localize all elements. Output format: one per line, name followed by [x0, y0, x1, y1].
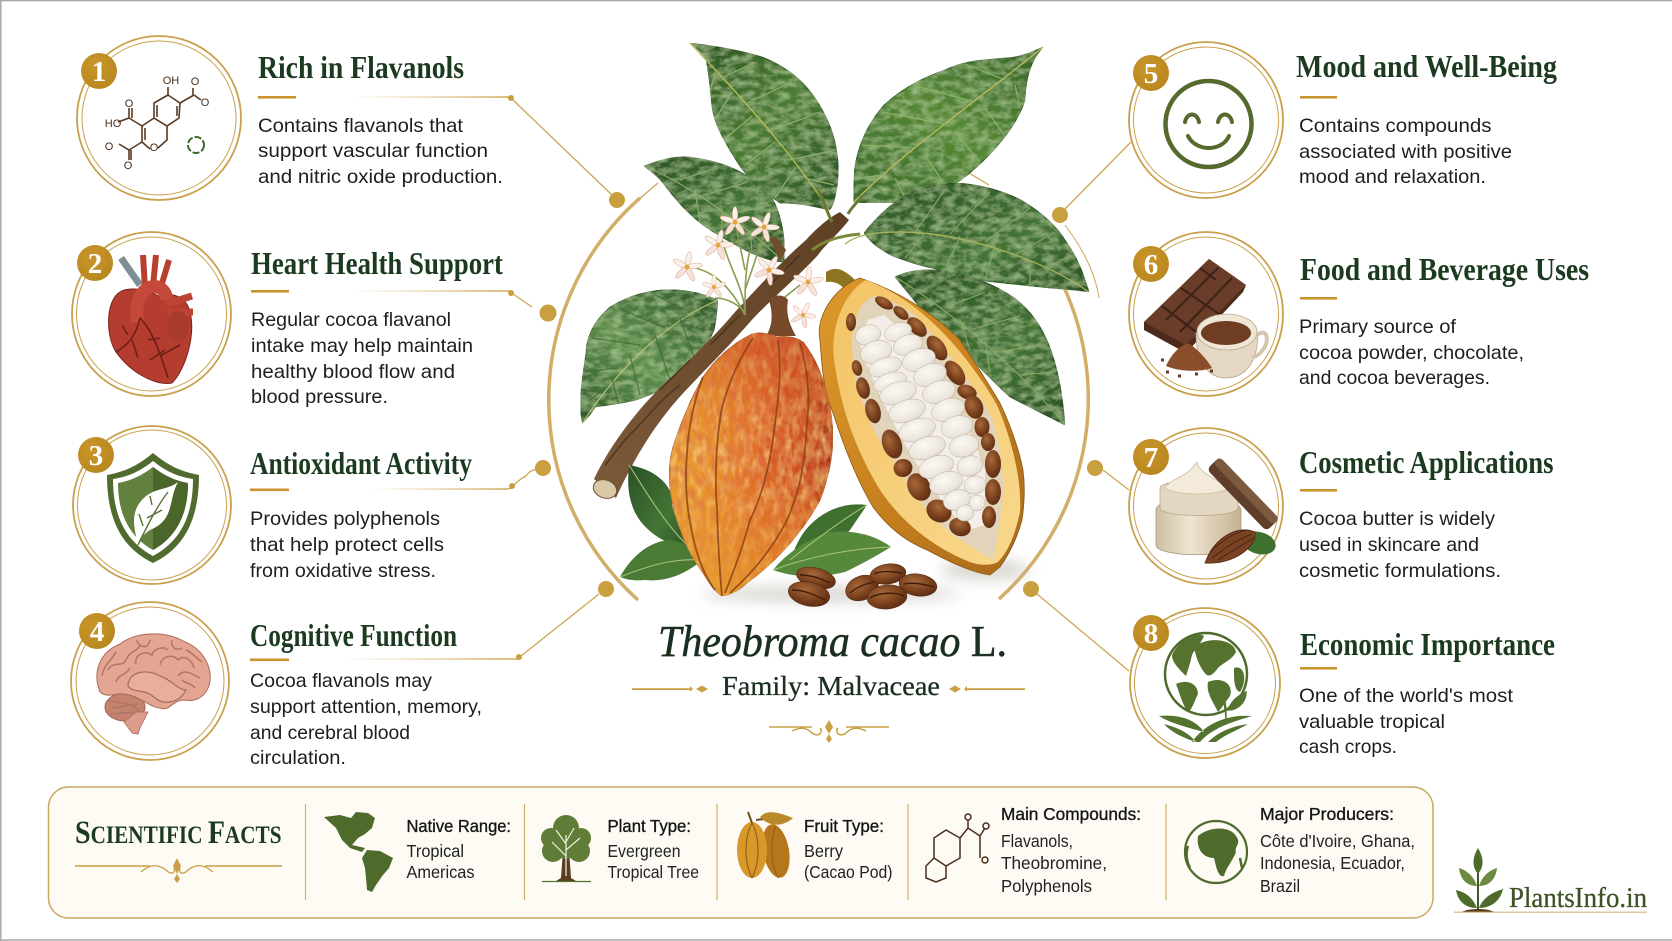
value: Flavanols, — [1001, 831, 1073, 851]
leaf: top right — [854, 47, 1043, 203]
icon: chocolate bar and cocoa cup — [1144, 259, 1267, 378]
label: Main Compounds: — [1001, 804, 1141, 824]
panel 5: mood and well-being — [1129, 42, 1557, 198]
description: that help protect cells — [250, 534, 444, 556]
flowers — [669, 206, 825, 331]
value — [608, 841, 699, 882]
number badge 4 — [79, 613, 115, 649]
heading accent — [250, 488, 289, 491]
panel 2: heart health support — [72, 232, 503, 408]
whole cacao pod — [669, 296, 833, 596]
description — [258, 115, 503, 188]
icon: cacao pods — [737, 812, 793, 880]
number badge 6: 6 — [1144, 249, 1158, 281]
number badge 6 — [1133, 246, 1169, 282]
heading: Economic Importance — [1300, 626, 1555, 662]
icon: flavanol molecule: O — [191, 76, 200, 88]
main compounds item — [926, 804, 1141, 896]
description — [1299, 508, 1501, 582]
icon: flavanol molecule: OH — [163, 75, 179, 87]
heading accent — [1300, 96, 1337, 99]
number badge 2: 2 — [88, 248, 102, 280]
description: Cocoa flavanols may — [250, 670, 432, 692]
connectors — [340, 95, 1131, 671]
value: Indonesia, Ecuador, — [1260, 853, 1405, 873]
cocoa beans — [786, 562, 938, 611]
facts panel background — [48, 787, 1433, 918]
value — [1260, 831, 1415, 896]
icon ring — [1130, 608, 1280, 758]
value: Berry — [804, 841, 843, 861]
icon: tree — [541, 815, 591, 882]
description: healthy blood flow and — [251, 361, 455, 383]
description: and cerebral blood — [250, 722, 410, 744]
description — [250, 670, 482, 769]
native range item — [324, 812, 511, 892]
facts ornament — [75, 858, 282, 883]
description: Regular cocoa flavanol — [251, 309, 451, 331]
leaf: right middle — [845, 183, 1089, 292]
heading: Rich in Flavanols — [258, 49, 464, 85]
description: intake may help maintain — [251, 335, 473, 357]
panel 1: rich in flavanols — [77, 36, 503, 200]
number badge 1 — [81, 53, 117, 89]
description: associated with positive — [1299, 141, 1512, 163]
icon ring — [77, 36, 241, 200]
gold ring arcs — [549, 198, 1088, 600]
value: Tropical — [406, 841, 464, 861]
heading accent — [250, 658, 289, 661]
panel 4: cognitive function — [71, 602, 482, 769]
panel: scientific facts — [48, 787, 1433, 918]
value: Tropical Tree — [608, 862, 699, 882]
description: Contains compounds — [1299, 115, 1492, 137]
icon: flavanol molecule: O — [201, 97, 210, 109]
heading: Antioxidant Activity — [250, 445, 472, 481]
icon ring — [73, 426, 231, 584]
heading: Mood and Well-Being — [1296, 48, 1557, 84]
description: used in skincare and — [1299, 534, 1479, 556]
major producers item — [1185, 804, 1415, 896]
icon: flavanol molecule: O — [105, 141, 114, 153]
number badge 2 — [77, 245, 113, 281]
icon ring — [1129, 428, 1283, 584]
plant type item — [541, 815, 699, 882]
facts dividers — [306, 804, 1166, 900]
icon: flavanol molecule — [105, 75, 210, 172]
icon: globe — [1185, 821, 1247, 883]
cut cacao pod — [819, 269, 1024, 575]
heading accent — [251, 290, 289, 293]
heading: Food and Beverage Uses — [1300, 251, 1589, 287]
subtitle: family: Family: Malvaceae — [722, 670, 940, 701]
description — [251, 309, 473, 408]
value: Brazil — [1260, 876, 1300, 896]
description: circulation. — [250, 747, 346, 769]
panel 8: economic importance — [1130, 608, 1555, 758]
leaf: top left — [690, 43, 838, 210]
icon ring — [1129, 42, 1283, 198]
logo ground line — [1454, 912, 1647, 913]
description — [250, 508, 444, 582]
center ornament — [769, 720, 889, 743]
description: cosmetic formulations. — [1299, 560, 1501, 582]
number badge 7: 7 — [1144, 442, 1158, 474]
value: Americas — [406, 862, 475, 882]
description: support vascular function — [258, 140, 488, 162]
description — [1299, 115, 1512, 188]
heading: Cognitive Function — [250, 617, 457, 653]
central illustration: cacao branch — [549, 43, 1089, 611]
heading: Heart Health Support — [251, 245, 503, 281]
value — [804, 841, 892, 882]
icon: americas map — [324, 812, 393, 892]
icon ring — [72, 232, 231, 396]
description: Primary source of — [1299, 316, 1457, 338]
description: cash crops. — [1299, 736, 1397, 758]
icon ring — [1129, 232, 1283, 396]
description: Contains flavanols that — [258, 115, 464, 137]
description: and cocoa beverages. — [1299, 367, 1490, 389]
leaf: lower right back — [895, 270, 1065, 425]
number badge 4: 4 — [90, 616, 104, 648]
logo plant — [1456, 848, 1503, 912]
description — [1299, 316, 1524, 389]
description: cocoa powder, chocolate, — [1299, 342, 1524, 364]
branch — [591, 190, 862, 502]
number badge 8 — [1133, 615, 1169, 651]
label: Plant Type: — [608, 816, 691, 836]
icon ring — [71, 602, 229, 760]
description: valuable tropical — [1299, 711, 1445, 733]
icon: flavanol molecule: O — [124, 160, 133, 172]
ground shadow — [700, 560, 1030, 602]
heading: Cosmetic Applications — [1299, 444, 1554, 480]
description: blood pressure. — [251, 386, 388, 408]
icon: smiley face — [1166, 81, 1252, 167]
number badge 3 — [78, 437, 114, 473]
logo text: PlantsInfo.in — [1509, 883, 1647, 914]
value — [406, 841, 475, 882]
panel 6: food and beverage uses — [1129, 232, 1589, 396]
icon: shield with leaf — [107, 453, 199, 563]
icon: brain — [97, 634, 210, 734]
description: mood and relaxation. — [1299, 166, 1486, 188]
number badge 3: 3 — [89, 440, 103, 472]
leaf: left lower — [581, 290, 718, 423]
description: from oxidative stress. — [250, 560, 436, 582]
label: Native Range: — [406, 816, 511, 836]
title: species name: Theobroma cacao L. — [658, 617, 1007, 666]
icon: globe and fields — [1159, 633, 1252, 742]
label: Major Producers: — [1260, 804, 1394, 824]
number badge 8: 8 — [1144, 618, 1158, 650]
facts heading: SCIENTIFIC FACTS — [75, 815, 282, 851]
description: Cocoa butter is widely — [1299, 508, 1495, 530]
value: Côte d'Ivoire, Ghana, — [1260, 831, 1415, 851]
value: (Cacao Pod) — [804, 862, 892, 882]
description: support attention, memory, — [250, 696, 482, 718]
icon: flavanol molecule: O — [125, 98, 134, 110]
heading accent — [258, 96, 296, 99]
description: Provides polyphenols — [250, 508, 440, 530]
icon: flavanol molecule: O — [150, 142, 159, 154]
heading accent — [1300, 489, 1337, 492]
number badge 5: 5 — [1144, 58, 1158, 90]
description — [1299, 685, 1514, 758]
fruit type item — [737, 812, 892, 882]
number badge 7 — [1133, 439, 1169, 475]
leaf: left upper — [644, 157, 784, 262]
icon: flavanol molecule: HO — [105, 118, 122, 130]
leaves: base — [620, 465, 891, 580]
heading accent — [1300, 667, 1337, 670]
number badge 5 — [1133, 55, 1169, 91]
value: Theobromine, — [1001, 853, 1107, 873]
icon: cream jar with cocoa pod — [1156, 457, 1279, 563]
panel 7: cosmetic applications — [1129, 428, 1554, 584]
family flourishes — [632, 686, 1025, 692]
heading accent — [1300, 297, 1337, 300]
value — [1001, 831, 1107, 896]
icon: compound structure — [926, 814, 989, 882]
icon: heart — [109, 255, 193, 383]
description: and nitric oxide production. — [258, 166, 503, 188]
number badge 1: 1 — [92, 56, 106, 88]
value: Polyphenols — [1001, 876, 1092, 896]
value: Evergreen — [608, 841, 680, 861]
description: One of the world's most — [1299, 685, 1514, 707]
label: Fruit Type: — [804, 816, 884, 836]
logo: PlantsInfo.in — [1454, 848, 1647, 914]
panel 3: antioxidant activity — [73, 426, 472, 584]
